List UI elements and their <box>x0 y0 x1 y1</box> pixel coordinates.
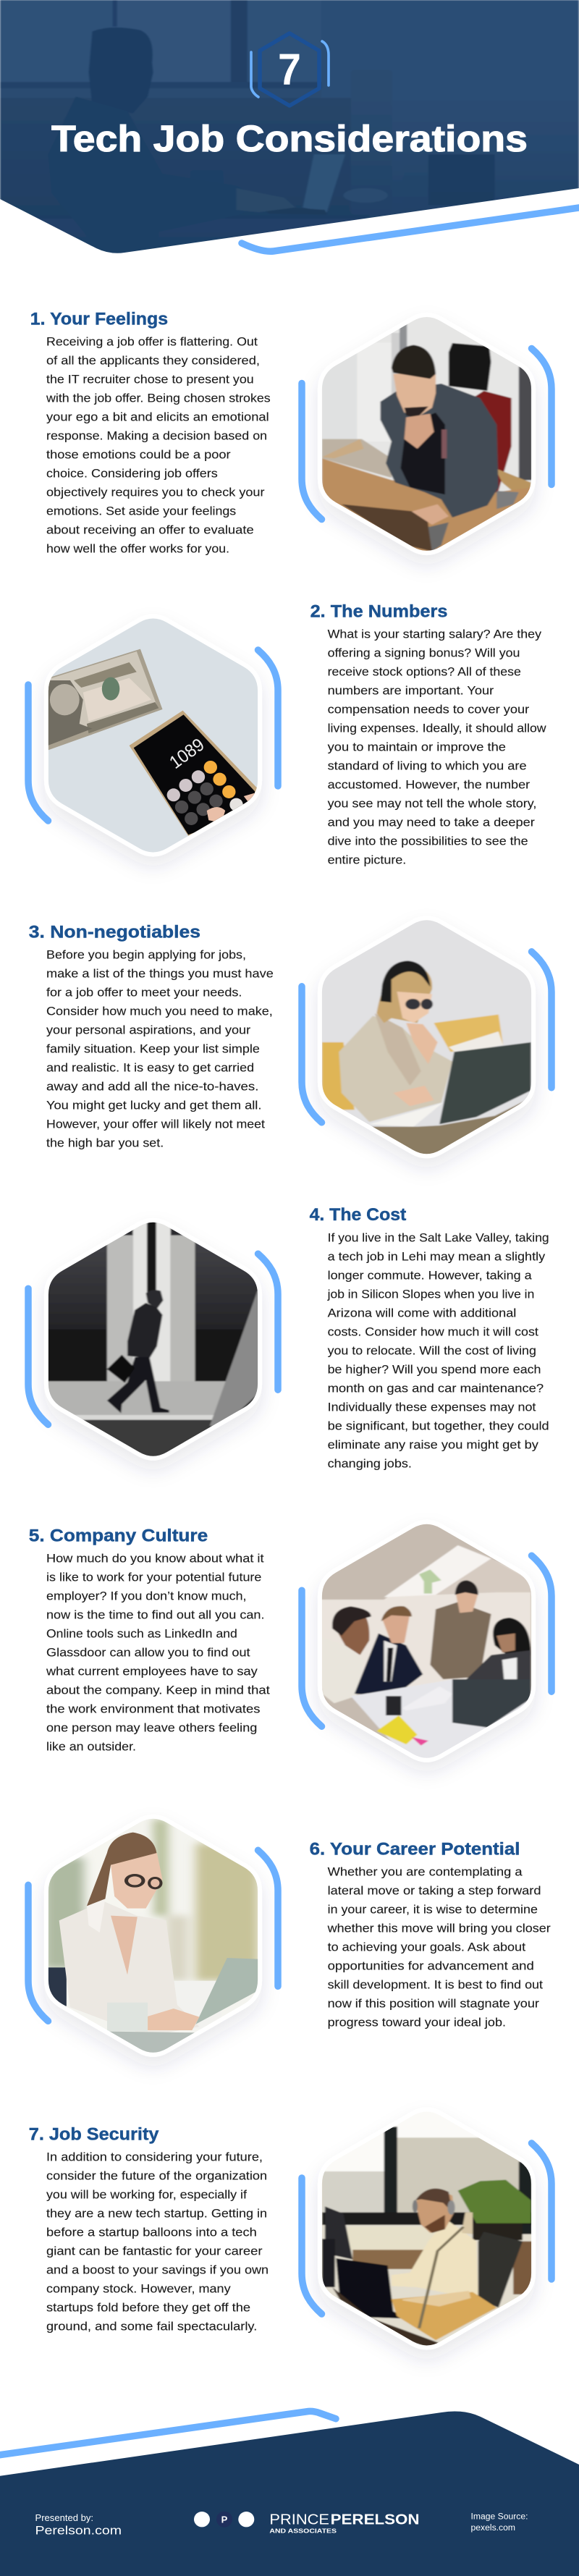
body text 5: is like to work for your potential future <box>46 1571 261 1584</box>
body text 2: numbers are important. Your <box>328 685 494 698</box>
body text 3: family situation. Keep your list simple <box>46 1043 260 1056</box>
heading 2: 2. The Numbers <box>310 602 447 622</box>
body text 1: response. Making a decision based on <box>46 429 267 442</box>
body text 3: away and add all the nice-to-haves. <box>46 1081 258 1094</box>
body text 2: receive stock options? All of these <box>328 666 521 679</box>
body text 4: longer commute. However, taking a <box>328 1270 533 1283</box>
body text 7: startups fold before they get off the <box>46 2302 250 2315</box>
body text 3: make a list of the things you must have <box>46 968 274 981</box>
body text 7: In addition to considering your future, <box>46 2151 263 2164</box>
footer blue swoosh <box>0 2411 336 2455</box>
presented by <box>35 2513 122 2538</box>
body text 5: about the company. Keep in mind that <box>46 1684 270 1697</box>
heading 1: 1. Your Feelings <box>30 310 168 329</box>
body text 2: and you may need to take a deeper <box>328 816 535 829</box>
body text 1 <box>46 335 271 555</box>
presented by: Presented by: <box>35 2513 93 2523</box>
logo: prince perelson: AND ASSOCIATES <box>269 2527 337 2534</box>
logo: prince perelson: P <box>221 2514 228 2525</box>
body text 1: your ego a bit and elicits an emotional <box>46 410 269 423</box>
body text 4: Arizona will come with additional <box>328 1307 516 1320</box>
body text 3: However, your offer will likely not meet <box>46 1118 265 1131</box>
body text 3: and realistic. It is easy to get carried <box>46 1062 254 1075</box>
body text 1: choice. Considering job offers <box>46 467 218 480</box>
body text 4: costs. Consider how much it will cost <box>328 1326 538 1339</box>
photo: woman in white blouse typing <box>44 1815 266 2056</box>
logo: prince perelson <box>194 2511 420 2534</box>
body text 6: in your career, it is wise to determine <box>328 1904 538 1917</box>
body text 4: Individually these expenses may not <box>328 1401 536 1414</box>
body text 5: one person may leave others feeling <box>46 1721 257 1734</box>
body text 1: Receiving a job offer is flattering. Out <box>46 335 258 348</box>
heading 3: 3. Non-negotiables <box>29 922 200 942</box>
hexagon frame 1 <box>322 317 531 551</box>
body text 3: the high bar you set. <box>46 1137 164 1150</box>
body text 7: company stock. However, many <box>46 2283 231 2296</box>
body text 2: compensation needs to cover your <box>328 704 530 717</box>
body text 2: dive into the possibilities to see the <box>328 835 528 848</box>
image source <box>470 2513 528 2533</box>
body text 2: accustomed. However, the number <box>328 779 531 792</box>
body text 5: like an outsider. <box>46 1740 136 1753</box>
heading 6: 6. Your Career Potential <box>310 1840 520 1859</box>
section 3: non-negotiables <box>29 917 551 1158</box>
hexagon frame 6 <box>48 1819 258 2053</box>
body text 1: how well the offer works for you. <box>46 542 229 555</box>
heading 5: 5. Company Culture <box>29 1526 208 1545</box>
blue arcs 7 <box>302 2143 551 2314</box>
title: Tech Job Considerations <box>51 118 528 159</box>
body text 1: those emotions could be a poor <box>46 448 231 461</box>
image source: pexels.com <box>470 2524 515 2533</box>
heading 7: 7. Job Security <box>29 2125 159 2145</box>
body text 7: they are a new tech startup. Getting in <box>46 2208 267 2221</box>
body text 4 <box>327 1232 549 1471</box>
body text 7: before a startup balloons into a tech <box>46 2226 257 2239</box>
body text 5 <box>46 1552 270 1753</box>
body text 3: for a job offer to meet your needs. <box>46 987 242 1000</box>
body text 2: offering a signing bonus? Will you <box>328 647 520 660</box>
hexagon frame 3 <box>322 920 531 1154</box>
body text 2: living expenses. Ideally, it should allow <box>328 722 546 735</box>
body text 2: you see may not tell the whole story, <box>328 798 536 811</box>
blue arcs 4 <box>28 1254 278 1424</box>
body text 2: you to maintain or improve the <box>328 741 506 754</box>
blue arcs 3 <box>302 952 551 1123</box>
body text 5: the work environment that motivates <box>46 1702 260 1715</box>
body text 1: emotions. Set aside your feelings <box>46 504 236 518</box>
heading 4: 4. The Cost <box>310 1205 406 1225</box>
body text 1: with the job offer. Being chosen strokes <box>46 392 271 405</box>
body text 5: what current employees have to say <box>46 1665 258 1678</box>
body text 1: objectively requires you to check your <box>46 486 265 499</box>
body text 6: skill development. It is best to find out <box>328 1979 543 1992</box>
photo: cash and calculator phone: 1089 <box>166 735 208 773</box>
body text 7 <box>46 2151 269 2334</box>
body text 6: now if this position will stagnate your <box>328 1998 539 2011</box>
footer panel <box>0 2411 579 2576</box>
body text 5: employer? If you don’t know much, <box>46 1589 246 1602</box>
blue arcs 2 <box>28 650 278 821</box>
body text 2: What is your starting salary? Are they <box>328 628 542 641</box>
body text 7: you will be working for, especially if <box>46 2189 247 2202</box>
body text 4: eliminate any raise you might get by <box>328 1439 539 1452</box>
body text 4: be significant, but together, they could <box>328 1420 549 1433</box>
presented by: Perelson.com <box>35 2524 122 2538</box>
blue arcs 5 <box>302 1555 551 1726</box>
photo: team around a laptop <box>318 1520 539 1761</box>
body text 6: progress toward your ideal job. <box>328 2017 506 2030</box>
photo: businessman walking <box>44 1218 266 1460</box>
body text 6: whether this move will bring you closer <box>327 1922 551 1935</box>
image source: Image Source: <box>470 2513 528 2522</box>
blue arcs 1 <box>302 349 551 520</box>
hexagon frame 4 <box>48 1222 258 1456</box>
blue arcs 6 <box>28 1850 278 2021</box>
body text 4: If you live in the Salt Lake Valley, taking <box>328 1232 549 1245</box>
body text 6: opportunities for advancement and <box>328 1960 534 1973</box>
body text 6 <box>327 1866 551 2030</box>
body text 2: standard of living to which you are <box>328 760 527 773</box>
body text 3 <box>46 949 274 1150</box>
body text 6: lateral move or taking a step forward <box>328 1885 541 1898</box>
section 1: your feelings <box>30 310 551 555</box>
body text 4: job in Silicon Slopes when you live in <box>327 1288 534 1301</box>
body text 2: entire picture. <box>328 854 406 867</box>
photo: cash and calculator phone <box>44 615 266 856</box>
section 7: job security <box>29 2108 551 2350</box>
photo: woman with headphones and laptop <box>318 917 539 1158</box>
body text 4: you to relocate. Will the cost of living <box>328 1345 536 1358</box>
body text 7: ground, and some fail spectacularly. <box>46 2320 257 2334</box>
body text 1: of all the applicants they considered, <box>46 354 260 367</box>
body text 4: be higher? Will you spend more each <box>328 1364 541 1377</box>
body text 4: month on gas and car maintenance? <box>328 1382 544 1395</box>
body text 3: Consider how much you need to make, <box>46 1005 273 1018</box>
section 4: the cost <box>28 1205 549 1471</box>
header blue swoosh <box>242 208 579 251</box>
body text 3: You might get lucky and get them all. <box>46 1099 261 1112</box>
body text 4: changing jobs. <box>328 1458 412 1471</box>
number badge: 7 <box>278 45 301 94</box>
photo: man with headset at desk <box>321 2125 531 2345</box>
body text 1: the IT recruiter chose to present you <box>46 373 254 386</box>
hexagon frame 5 <box>322 1524 531 1758</box>
header panel with photo background <box>0 0 579 253</box>
body text 7: and a boost to your savings if you own <box>46 2264 269 2277</box>
body text 5: now is the time to find out all you can. <box>46 1608 265 1621</box>
photo: man at laptop <box>318 313 539 555</box>
body text 5: Glassdoor can allow you to find out <box>46 1646 250 1659</box>
section 6: career potential <box>28 1815 551 2056</box>
body text 4: a tech job in Lehi may mean a slightly <box>328 1251 546 1264</box>
section 2: the numbers <box>28 602 546 867</box>
body text 7: consider the future of the organization <box>46 2170 267 2183</box>
body text 6: Whether you are contemplating a <box>328 1866 523 1879</box>
logo: prince perelson: PERELSON <box>331 2511 420 2528</box>
body text 7: giant can be fantastic for your career <box>46 2245 263 2258</box>
body text 6: to achieving your goals. Ask about <box>328 1941 526 1954</box>
body text 5: How much do you know about what it <box>46 1552 264 1565</box>
number badge <box>251 33 329 106</box>
body text 1: about receiving an offer to evaluate <box>46 523 254 536</box>
hexagon frame 7 <box>322 2112 531 2345</box>
hexagon frame 2 <box>48 618 258 853</box>
logo: prince perelson: PRINCE <box>269 2511 329 2528</box>
section 5: company culture <box>29 1520 551 1761</box>
body text 5: Online tools such as LinkedIn and <box>46 1627 237 1640</box>
body text 3: your personal aspirations, and your <box>46 1024 251 1037</box>
body text 3: Before you begin applying for jobs, <box>46 949 246 962</box>
body text 2 <box>328 628 546 867</box>
